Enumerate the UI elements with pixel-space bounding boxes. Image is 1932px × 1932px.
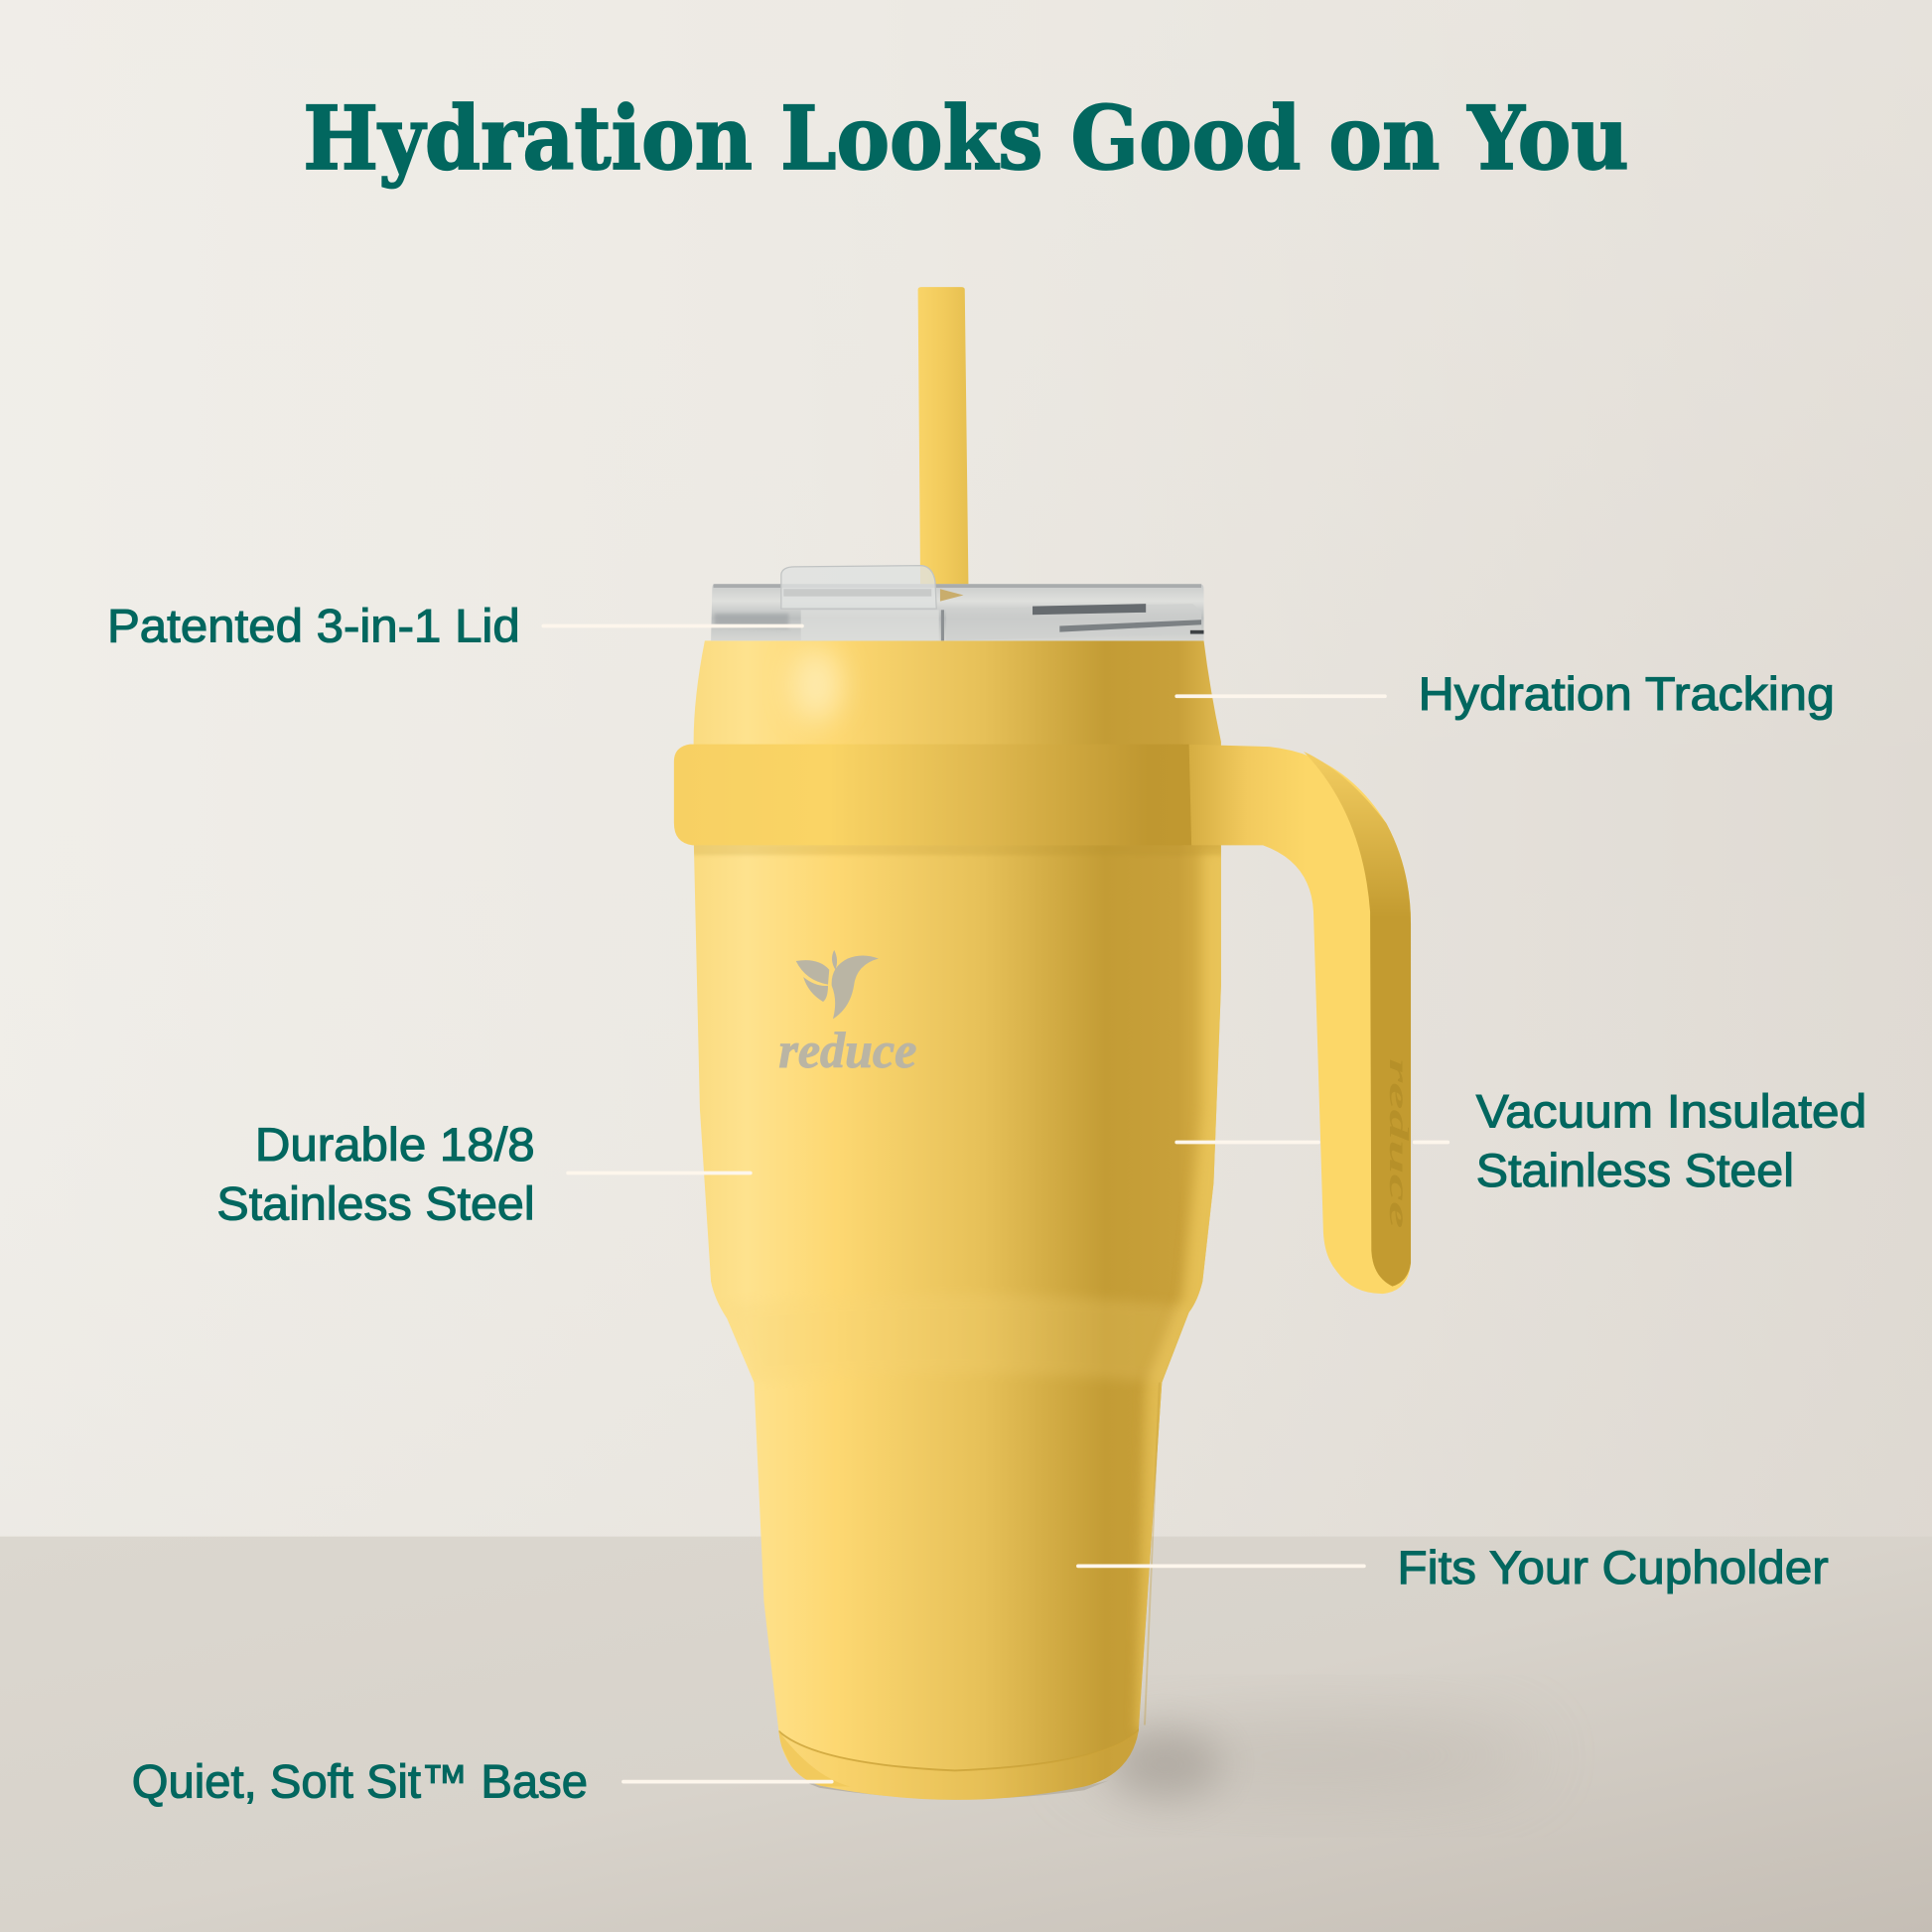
handle engraved logo: reduce [1384, 1058, 1414, 1228]
background wall [0, 0, 1932, 1538]
tumbler body [690, 640, 1232, 1811]
logo wordmark: reduce [778, 1024, 916, 1079]
title: Hydration Looks Good on You [303, 86, 1629, 190]
callout: vacuum insulated: Stainless Steel [1476, 1144, 1794, 1196]
callout: fits cupholder: Fits Your Cupholder [1397, 1541, 1829, 1593]
lid [711, 566, 1204, 640]
callout: soft sit base: Quiet, Soft Sit™ Base [132, 1755, 588, 1808]
callout: vacuum insulated: Vacuum Insulated [1476, 1085, 1866, 1138]
callout: durable stainless steel: Stainless Steel [216, 1177, 535, 1230]
tumbler illustration [674, 287, 1414, 1811]
reduce logo [778, 950, 916, 1079]
callout: patented lid: Patented 3-in-1 Lid [107, 600, 520, 652]
callout: hydration tracking: Hydration Tracking [1418, 667, 1835, 720]
straw [918, 287, 968, 589]
handle [1182, 745, 1414, 1294]
callout: vacuum insulated [1176, 1085, 1866, 1196]
collar band [674, 745, 1191, 845]
background floor [0, 1537, 1932, 1932]
callout: durable stainless steel: Durable 18/8 [255, 1118, 535, 1171]
tumbler shadow [1072, 1719, 1540, 1799]
logo mark [796, 950, 879, 1019]
callout: durable stainless steel [216, 1118, 751, 1230]
base shadow sliver [801, 1780, 1109, 1800]
